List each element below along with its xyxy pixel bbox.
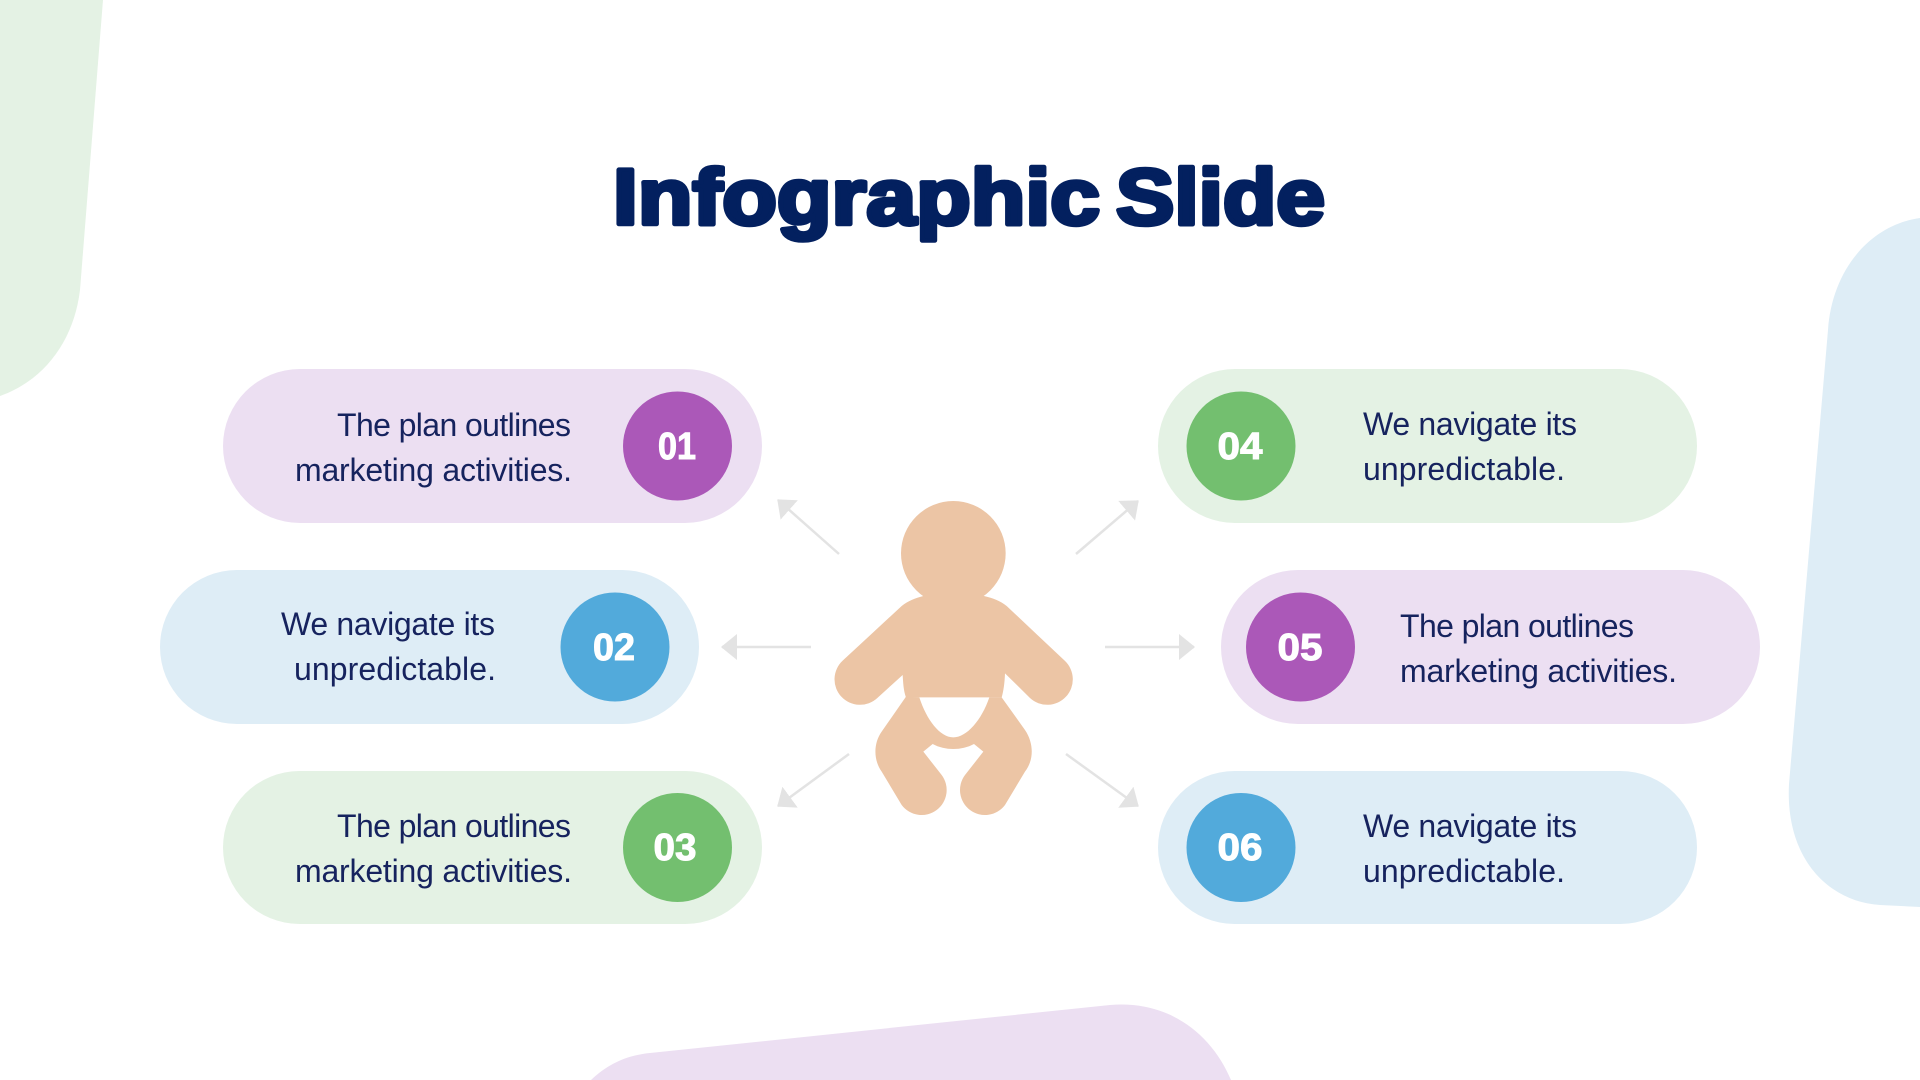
panel: item 02 [160,570,699,724]
badge: 03 [623,793,732,902]
panel: item 06 [1158,771,1697,924]
text: item 03: marketing activities. [295,853,572,889]
background shape: green top-left [0,0,103,396]
panel: item 01 [223,369,762,523]
badge: 01: 01 [658,426,696,468]
arrow: to item 03 [778,754,849,806]
arrow: to item 01 [778,500,839,554]
text: item 02: unpredictable. [294,651,496,687]
badge: 06 [1186,793,1296,902]
text: item 05: The plan outlines [1400,608,1634,644]
panel: item 03 [223,771,762,924]
text: item 01: marketing activities. [295,452,572,488]
title [613,152,1325,241]
badge: 05: 05 [1278,627,1322,669]
text: item 03 [295,808,572,889]
icon: baby [835,501,1073,815]
badge: 02: 02 [593,627,635,669]
badge: 04: 04 [1218,426,1262,468]
text: item 01 [295,407,572,488]
text: item 05: marketing activities. [1400,653,1677,689]
text: item 04: unpredictable. [1363,451,1565,487]
background shape: blue right [1789,218,1920,907]
text: item 06 [1363,808,1577,889]
panel: item 05 [1221,570,1760,724]
badge: 03: 03 [654,827,696,869]
text: item 01: The plan outlines [337,407,571,443]
text: item 02: We navigate its [281,606,495,642]
text: item 03: The plan outlines [337,808,571,844]
background shape: purple bottom [591,1005,1231,1080]
badge: 06: 06 [1218,827,1262,869]
text: item 02 [281,606,496,687]
badge: 05 [1246,592,1355,702]
badge: 04 [1186,392,1296,500]
title: Slide [1116,152,1325,241]
arrow: to item 06 [1066,754,1138,806]
text: item 04: We navigate its [1363,406,1577,442]
text: item 06: We navigate its [1363,808,1577,844]
badge: 01 [623,392,732,500]
text: item 06: unpredictable. [1363,853,1565,889]
badge: 02 [560,592,670,702]
text: item 04 [1363,406,1577,487]
arrow: to item 02 [722,646,811,648]
text: item 05 [1400,608,1677,689]
title: Infographic [613,152,1100,241]
arrow: to item 04 [1076,501,1138,554]
panel: item 04 [1158,369,1697,523]
arrow: to item 05 [1105,646,1194,648]
